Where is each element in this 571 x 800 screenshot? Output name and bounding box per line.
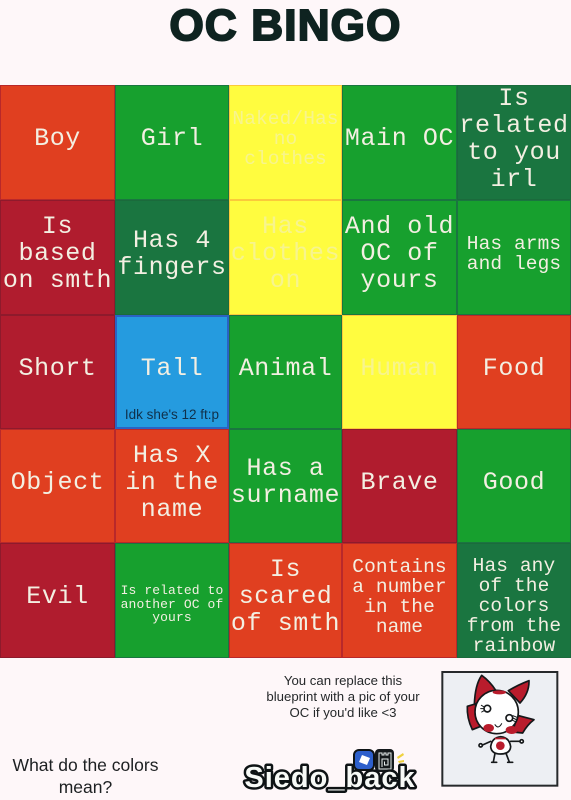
cell: Tall: Tall bbox=[141, 354, 203, 382]
cell: Has 4 fingers: Has 4 bbox=[133, 226, 211, 254]
icon: sparkles bbox=[397, 753, 404, 763]
cell: Evil bbox=[0, 543, 115, 658]
cell: Good bbox=[457, 429, 571, 543]
cell: Has X in the name: name bbox=[141, 494, 203, 524]
cell: Has a surname: Has a bbox=[246, 454, 324, 483]
cell: Girl bbox=[115, 85, 229, 200]
cell: Has clothes on: clothes bbox=[231, 239, 340, 268]
cell: Contains a number: a number bbox=[352, 576, 447, 598]
cell: Has X in the name bbox=[115, 429, 229, 543]
cell: Has clothes on: on bbox=[270, 266, 301, 295]
cell: Contains a number: name bbox=[376, 616, 423, 638]
text: what do the colors mean: What do the colors bbox=[13, 755, 158, 775]
cell: Has a surname: surname bbox=[231, 481, 340, 510]
cell: Is related to another OC bbox=[115, 543, 229, 658]
cell: Is related to another OC: another OC of bbox=[121, 597, 223, 612]
cell: Is based on smth bbox=[0, 200, 115, 315]
note: Tall cell: Idk she's 12 ft:p bbox=[125, 407, 219, 422]
cell: Brave bbox=[342, 429, 457, 543]
cell: Food: Food bbox=[483, 354, 545, 382]
cell: Is scared of smth: of smth bbox=[231, 609, 340, 638]
cell: Is related to you irl bbox=[457, 85, 571, 200]
cell: Short: Short bbox=[18, 354, 96, 382]
cell: Has any of the colors: rainbow bbox=[473, 634, 555, 656]
cell: Has clothes on bbox=[229, 200, 342, 315]
cell: Contains a number: Contains bbox=[352, 556, 447, 578]
cell: Short bbox=[0, 315, 115, 429]
cell: Is based on smth: based bbox=[18, 239, 96, 268]
cell: Object: Object bbox=[11, 468, 104, 496]
username text: Siedo_back bbox=[244, 762, 416, 794]
cell: Animal: Animal bbox=[239, 354, 332, 382]
cell: Boy: Boy bbox=[34, 124, 81, 153]
cell: Is scared of smth bbox=[229, 543, 342, 658]
text: replace blueprint bbox=[266, 673, 420, 720]
cell: And old OC of yours bbox=[342, 200, 457, 315]
bingo grid bbox=[0, 85, 571, 658]
cell: Contains a number bbox=[342, 543, 457, 658]
frame bbox=[442, 672, 557, 786]
cell: Is based on smth: on smth bbox=[3, 266, 112, 295]
cell: Has 4 fingers: fingers bbox=[117, 252, 227, 282]
cell: Is related to you irl: related bbox=[459, 110, 569, 140]
text: replace blueprint: blueprint with a pic of your bbox=[266, 689, 420, 704]
OC character bbox=[467, 675, 534, 762]
cell: Food bbox=[457, 315, 571, 429]
cell: Girl: Girl bbox=[141, 124, 203, 153]
cell: Good: Good bbox=[483, 468, 545, 496]
cell: Naked: Naked/Has bbox=[232, 108, 339, 130]
cell: Is scared of smth: Is bbox=[270, 555, 301, 584]
cell: And old OC of yours: OC of bbox=[360, 239, 438, 268]
title: OC BINGO bbox=[169, 1, 402, 50]
cell: And old OC of yours: And old bbox=[345, 212, 454, 241]
cell: Tall bbox=[115, 315, 229, 429]
cell: Object bbox=[0, 429, 115, 543]
cell: Boy bbox=[0, 85, 115, 200]
cell: Has any of the colors: from the bbox=[467, 614, 561, 636]
icon: castle bbox=[375, 749, 394, 772]
cell: Is scared of smth: scared bbox=[239, 582, 332, 611]
cell: Animal bbox=[229, 315, 342, 429]
text: what do the colors mean bbox=[12, 755, 158, 797]
cell: Has X in the name: Has X bbox=[133, 440, 211, 470]
cell: Has X in the name: in the bbox=[125, 468, 219, 496]
cell: Is related to another OC: yours bbox=[152, 610, 192, 625]
text: replace blueprint: OC if you'd like <3 bbox=[290, 705, 396, 720]
icon: blue cube bbox=[354, 750, 374, 770]
cell: Has clothes on: Has bbox=[262, 212, 309, 241]
cell: Evil: Evil bbox=[26, 582, 89, 611]
cell: Naked: clothes bbox=[244, 148, 327, 170]
cell: Has any of the colors bbox=[457, 543, 571, 658]
cell: Has any of the colors: of the bbox=[479, 574, 549, 596]
cell: Main OC bbox=[342, 85, 457, 200]
cell: Naked bbox=[229, 85, 342, 200]
panel: OC picture bbox=[441, 671, 558, 787]
cell: Has arms and legs bbox=[457, 200, 571, 315]
cell: Has 4 fingers bbox=[115, 200, 229, 315]
cell: Has arms and legs: Has arms bbox=[467, 232, 561, 254]
cell: Human bbox=[342, 315, 457, 429]
cell: Is related to you irl: irl bbox=[491, 164, 537, 194]
cell: Has any of the colors: colors bbox=[479, 594, 549, 616]
username badge bbox=[242, 749, 418, 794]
cell: Human: Human bbox=[360, 354, 438, 382]
cell: Is based on smth: Is bbox=[42, 212, 73, 241]
cell: Is related to you irl: to you bbox=[467, 138, 561, 166]
cell: Brave: Brave bbox=[360, 468, 438, 496]
cell: Contains a number: in the bbox=[364, 596, 435, 618]
cell: Is related to another OC: Is related to bbox=[121, 583, 223, 598]
text: what do the colors mean: mean? bbox=[59, 777, 112, 797]
cell: Main OC: Main OC bbox=[345, 124, 454, 153]
cell: Has a surname bbox=[229, 429, 342, 543]
text: replace blueprint: You can replace this bbox=[284, 673, 402, 688]
cell: Naked: no bbox=[274, 128, 297, 150]
cell: Has any of the colors: Has any bbox=[473, 554, 555, 576]
cell: Has arms and legs: and legs bbox=[467, 252, 561, 274]
cell: And old OC of yours: yours bbox=[360, 266, 438, 295]
